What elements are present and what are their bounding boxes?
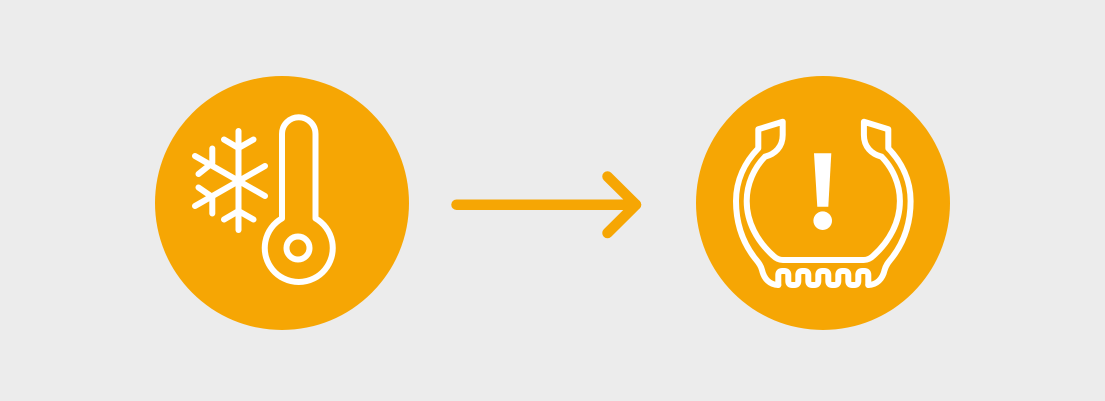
- panel: cold temperature icon: [155, 76, 409, 330]
- icon: snowflake: [195, 131, 265, 230]
- icon: exclamation mark: [813, 153, 832, 230]
- panel: tyre pressure warning icon: [696, 76, 950, 330]
- icon: tyre outline: [736, 122, 911, 285]
- icon: thermometer: [265, 117, 333, 282]
- arrow: [456, 176, 636, 233]
